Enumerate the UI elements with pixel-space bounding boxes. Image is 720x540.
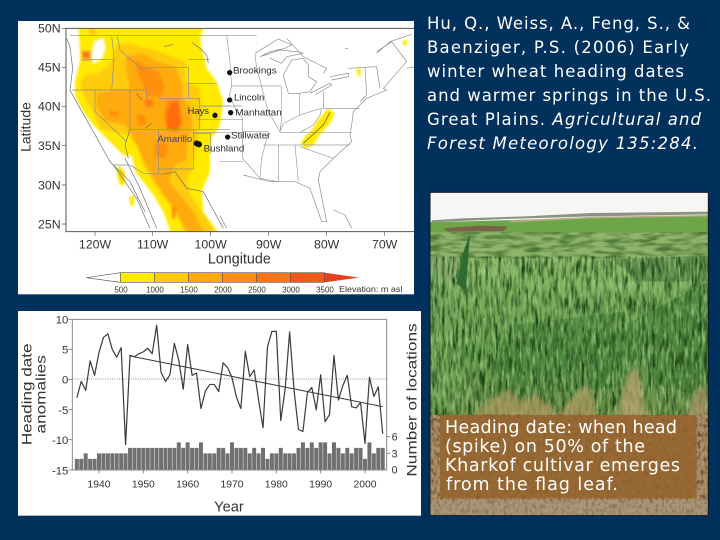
map: longitude tick labels [79,237,398,251]
map: station markers [194,70,233,147]
map: plot frame [62,28,414,236]
chart: left axis labels: 0 [62,375,68,387]
photo frame [430,192,708,516]
map: longitude tick labels: 120W [79,237,111,251]
map: station labels: Manhattan [235,107,282,117]
chart: year axis labels: 1950 [132,480,155,491]
map: elevation colour legend: 1000 [146,285,164,294]
caption text [445,418,680,495]
citation text: Forest Meteorology 135:284. [427,134,698,153]
caption text: Heading date: when head [445,418,677,438]
map: elevation colour legend: 2000 [214,285,232,294]
photo: tall wheat [430,256,708,418]
chart: year axis labels: 1970 [221,480,244,491]
map: elevation colour legend: 500 [114,285,128,294]
chart: year axis labels: 1990 [309,480,332,491]
chart: year axis labels: 1960 [176,480,199,491]
chart: left axis labels: -15 [52,465,68,477]
caption text: from the flag leaf. [446,475,618,495]
map: west state lines and coast [67,36,230,228]
chart: zero reference line [72,378,387,380]
citation text: Baenziger, P.S. (2006) Early [427,38,689,57]
map: station labels: Amarillo [157,134,192,144]
panel: elevation map [17,21,415,294]
citation text [427,14,711,153]
map: elevation colour legend: Elevation: m asl [339,285,403,294]
map: station labels: Stillwater [231,130,270,140]
map: latitude tick labels: 50N [38,22,61,36]
map: station labels: Hays [188,106,209,116]
chart: left axis title: Heading date [19,343,35,445]
map: latitude tick labels [38,22,61,231]
chart: year axis labels: 1980 [265,480,288,491]
map: station labels: Bushland [204,144,244,154]
citation text: and warmer springs in the U.S. [427,86,711,105]
map: longitude tick labels: 110W [137,237,169,251]
chart: left axis title second line: anomalies [33,355,49,433]
chart: number of locations bars [75,442,385,470]
photo: sky [430,192,708,222]
caption box [440,415,697,498]
chart: right axis labels [392,432,398,477]
chart: year axis title: Year [214,500,244,516]
map: elevation bands [67,25,415,235]
caption text: (spike) on 50% of the [445,437,645,457]
chart: left axis labels: 5 [62,345,68,357]
chart: year axis labels: 1940 [88,480,111,491]
chart: left axis labels: -5 [58,405,68,417]
photo: dry straw tufts [468,368,708,422]
panel: heading date anomalies chart [18,311,421,516]
citation text: Great Plains. Agricultural and [427,110,702,129]
map: elevation colour legend: 3000 [282,285,300,294]
map: east state lines and coast [187,34,415,228]
photo: dark furrow [457,233,470,292]
chart: left axis labels: -10 [52,435,68,447]
chart: trend line [130,356,383,407]
map: elevation colour legend: 3500 [316,285,334,294]
photo: bare soil patch [443,226,508,232]
map: latitude tick labels: 40N [38,100,61,114]
map: station labels [157,66,282,154]
map: longitude tick labels: 100W [195,237,227,251]
map: latitude tick labels: 30N [38,178,61,192]
photo: ground [430,415,708,516]
chart: left axis labels [52,315,68,477]
chart: year axis labels [88,480,377,491]
photo: middle rows of plots [430,232,708,259]
citation text: Hu, Q., Weiss, A., Feng, S., & [427,14,690,33]
chart: anomaly line [77,325,383,445]
map: latitude tick labels: 25N [38,217,61,231]
chart: right axis labels: 3 [392,448,398,460]
photo: distant horizon [432,212,708,222]
map: latitude tick labels: 35N [38,139,61,153]
map: station labels: Brookings [233,66,277,76]
chart: left axis labels: 10 [56,315,68,327]
map: station labels: Lincoln [234,92,264,102]
panel: wheat field photo [430,192,708,516]
map: longitude tick labels: 90W [256,237,282,251]
map: elevation colour legend: 2500 [248,285,266,294]
map: elevation colour legend: 1500 [180,285,198,294]
chart: right axis labels: 0 [392,465,398,477]
map: longitude tick labels: 80W [314,237,340,251]
citation text: winter wheat heading dates [427,62,684,81]
chart: right axis labels: 6 [392,432,398,444]
chart: frame and ticks [68,319,390,473]
photo: far field [430,216,708,232]
map: longitude axis title: Longitude [208,251,271,267]
chart: right axis title: Number of locations [404,323,420,477]
map: longitude tick labels: 70W [372,237,398,251]
map: latitude axis title: Latitude [17,102,33,152]
map: latitude tick labels: 45N [38,61,61,75]
map: elevation colour legend [86,273,403,294]
chart: year axis labels: 2000 [354,480,377,491]
caption text: Kharkof cultivar emerges [445,456,680,476]
